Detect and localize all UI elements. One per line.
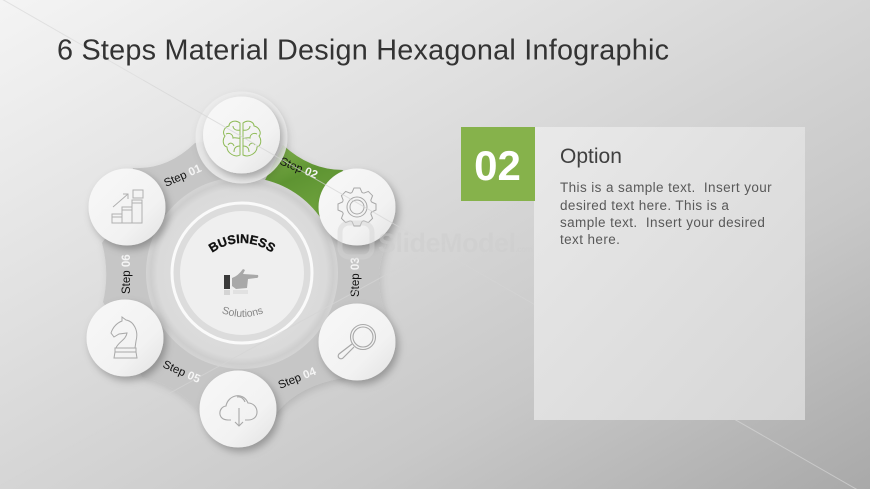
title: 6 Steps Material Design Hexagonal Infographic [57,34,669,66]
hexagonal diagram [86,96,402,456]
circle: brain with halo [196,92,288,184]
circle: chess knight [86,300,164,376]
solutions label: Solutions [222,306,263,318]
icon: pointing hand [224,269,258,295]
step 02 label: Step 02 [278,156,319,182]
step 05 label: Step 05 [161,359,202,386]
panel: option text [461,127,805,420]
icon: chess knight [111,317,137,358]
icon: gear [338,188,376,226]
step 03 label: Step 03 [350,257,362,297]
icon: stairs [112,190,143,223]
watermark [340,223,533,258]
body text: text here. [560,232,620,247]
business label: BUSINESS [208,234,276,252]
body text: desired text here. This is a [560,198,729,213]
icon: brain [223,121,261,156]
hub disc [146,177,338,369]
body text: sample text. Insert your desired [560,215,765,230]
circle: gear [318,168,396,246]
circle: magnifier [318,304,396,380]
circle: cloud [200,370,276,448]
hexagon band [102,136,390,412]
number badge: 02 [474,142,521,189]
watermark: SlideModel.com [378,228,533,258]
number badge [461,127,535,201]
step 01 label: Step 01 [162,162,204,190]
circle: stairs [88,168,166,246]
inner hub [172,203,312,343]
green step 02 band [264,145,343,222]
step 06 label: Step 06 [121,254,133,294]
option heading: Option [560,145,622,168]
icon: magnifier [338,324,376,359]
step 04 label: Step 04 [277,366,318,392]
icon: cloud [220,396,257,426]
body text: This is a sample text. Insert your [560,180,772,195]
